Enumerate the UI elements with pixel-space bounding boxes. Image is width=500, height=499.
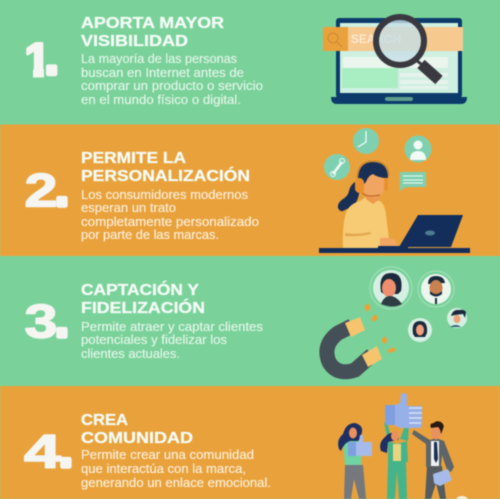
search bar <box>323 27 463 51</box>
panel: 1 visibility <box>26 13 468 108</box>
search bar: SEARCH <box>351 32 401 46</box>
icon: chat bubble <box>400 172 426 191</box>
illustration: support agent <box>319 128 470 253</box>
heading 1: VISIBILIDAD <box>81 33 188 50</box>
desk <box>319 248 470 253</box>
sparks <box>364 303 396 353</box>
magnet <box>327 317 382 372</box>
panel: 3 capture <box>0 256 500 386</box>
icon: user <box>404 136 432 162</box>
text block 2: Los consumidores modernos <box>81 188 248 202</box>
text block 4: Permite crear una comunidad <box>81 448 254 462</box>
text block 2: completamente personalizado <box>81 215 259 229</box>
text block 2 <box>81 188 259 242</box>
number 4 <box>24 421 73 478</box>
heading 1: APORTA MAYOR <box>81 15 224 32</box>
illustration: magnet and customers <box>327 267 467 372</box>
man right <box>412 421 454 499</box>
text block 3: clientes actuales. <box>81 347 180 361</box>
heading 2 <box>81 150 250 185</box>
number 3: 3 <box>24 294 58 348</box>
number 2: . <box>55 160 69 216</box>
number 3: . <box>55 291 69 347</box>
text block 4: generando un enlace emocional. <box>81 476 271 490</box>
laptop <box>378 215 463 249</box>
customer girl small <box>447 308 467 328</box>
heading 4: COMUNIDAD <box>81 430 193 447</box>
heading 2: PERSONALIZACIÓN <box>81 166 250 185</box>
woman middle <box>380 422 409 499</box>
text block 1: buscan en Internet antes de <box>81 66 244 80</box>
number 1 <box>26 41 58 78</box>
text block 2: esperan un trato <box>81 201 176 215</box>
customer woman small <box>408 318 432 342</box>
heading 3: CAPTACIÓN Y <box>81 280 199 299</box>
magnifier <box>376 17 440 80</box>
text block 3 <box>81 320 263 361</box>
text block 2: por parte de las marcas. <box>81 228 219 242</box>
text block 4: que interactúa con la marca, <box>81 462 246 476</box>
woman left <box>338 423 372 499</box>
small thumbs up <box>348 435 372 456</box>
panel: 2 personalization <box>0 124 500 256</box>
number 1: . <box>45 29 59 85</box>
text block 4 <box>81 448 271 490</box>
heading 1 <box>81 15 224 50</box>
text block 1 <box>81 52 263 107</box>
heading 2: PERMITE LA <box>81 150 186 167</box>
icon: clock <box>353 128 379 154</box>
customer man <box>418 271 454 307</box>
heading 4: CREA <box>81 412 128 429</box>
customer woman large <box>370 267 412 309</box>
illustration: people with thumbs up <box>338 393 468 499</box>
text block 1: en el mundo físico o digital. <box>81 93 241 107</box>
text block 1: comprar un producto o servicio <box>81 79 263 93</box>
text block 3: potenciales y fidelizar los <box>81 333 227 347</box>
text block 1: La mayoría de las personas <box>81 52 237 66</box>
heading 3: FIDELIZACIÓN <box>81 298 205 317</box>
number 3 <box>24 291 69 348</box>
small thumbs card <box>433 469 452 486</box>
big thumbs up <box>385 393 422 428</box>
heading 3 <box>81 280 205 317</box>
woman <box>338 161 398 248</box>
number 4: 4 <box>24 424 61 478</box>
icon: wrench <box>324 154 350 180</box>
number 2: 2 <box>24 164 58 216</box>
number 4: . <box>59 421 73 477</box>
icon: laptop with search <box>323 17 467 104</box>
number 1: 1 <box>24 33 50 86</box>
heading 4 <box>81 412 193 447</box>
panel: 4 community <box>0 386 500 499</box>
white shape bottom <box>456 496 468 499</box>
text block 3: Permite atraer y captar clientes <box>81 320 263 334</box>
number 2 <box>24 160 69 216</box>
